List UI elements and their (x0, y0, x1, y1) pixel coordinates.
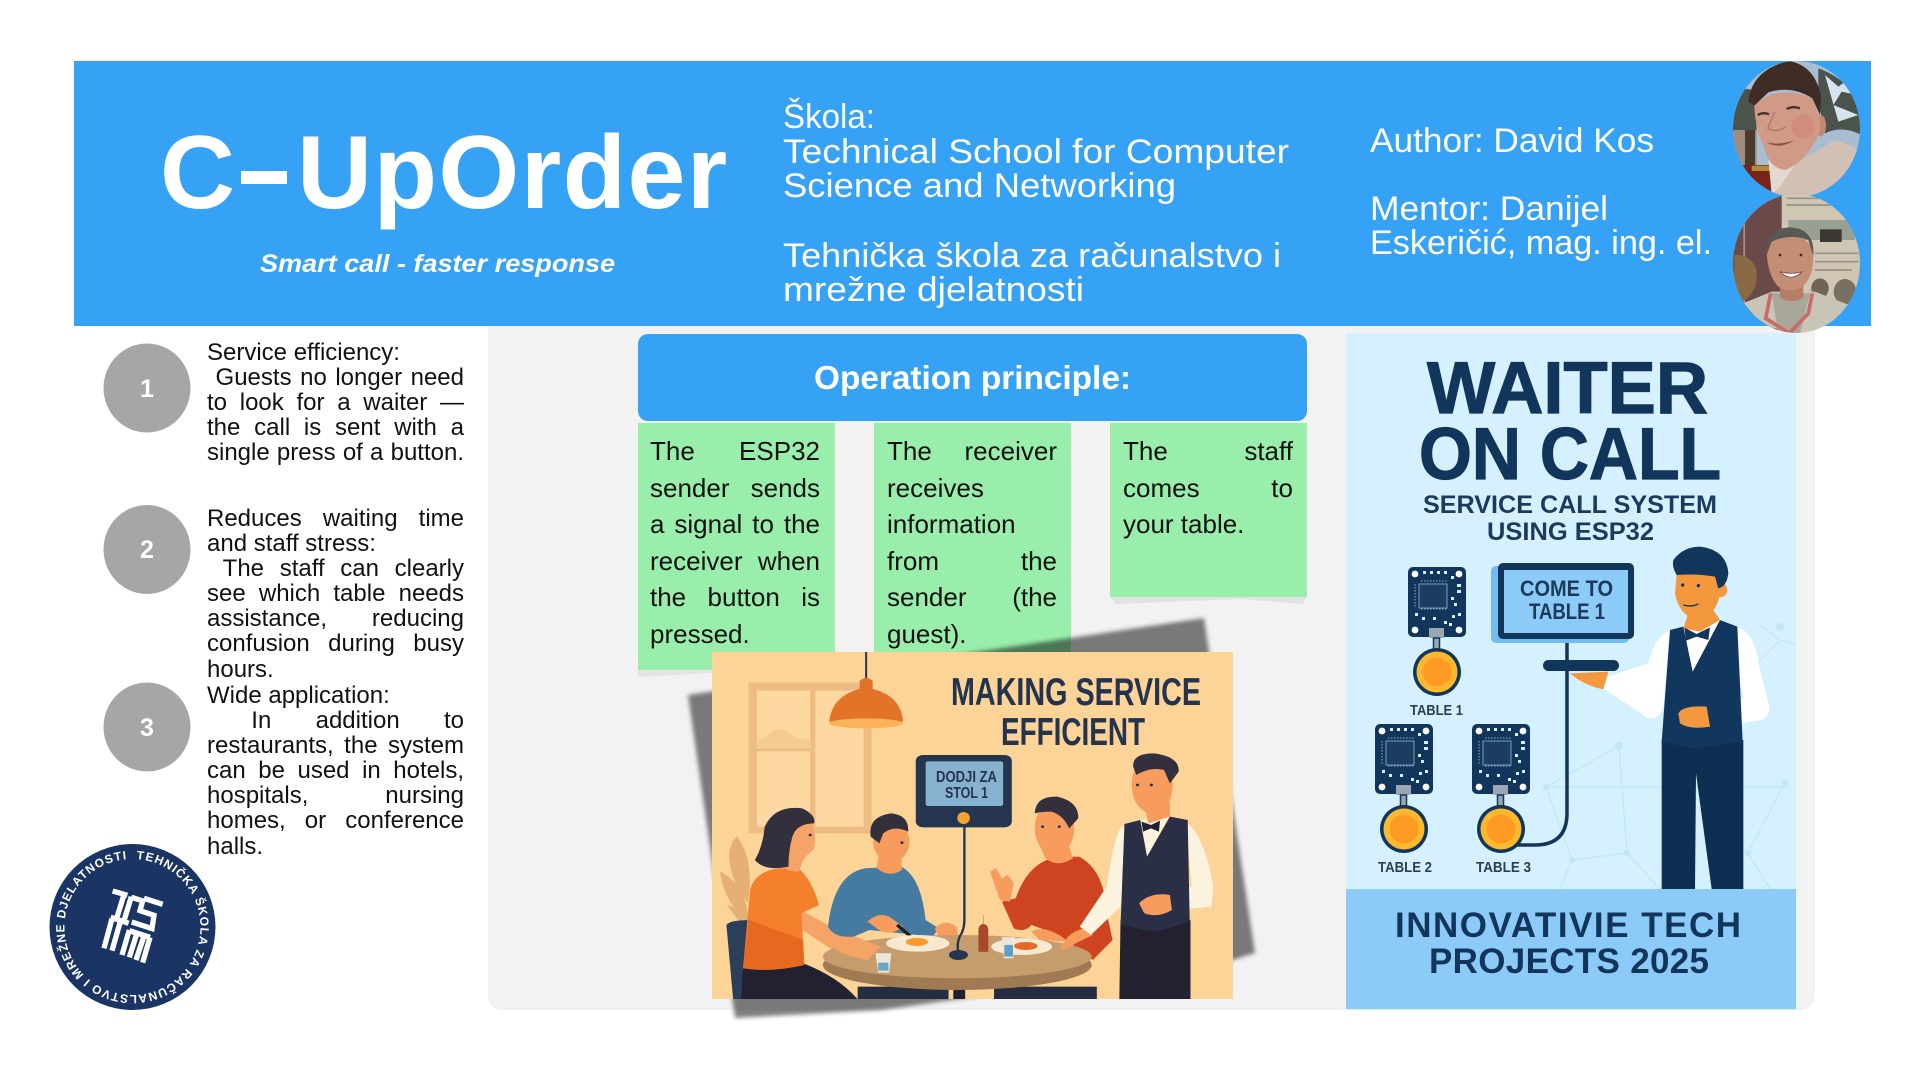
author and mentor: Mentor: Danijel (1370, 190, 1608, 228)
step text 1: pressed. (650, 618, 750, 648)
call display and wire (1491, 563, 1634, 845)
school text (783, 98, 1289, 309)
title: - (252, 129, 277, 213)
window (749, 682, 871, 833)
benefit text 3: hospitals, nursing (207, 782, 464, 809)
author and mentor (1370, 122, 1712, 262)
operation principle heading: Operation principle: (814, 359, 1131, 396)
header banner (74, 61, 1871, 326)
benefit text 2: Reduces waiting time (207, 505, 464, 532)
benefit text 2: The staff can clearly (223, 555, 464, 582)
school text: Škola: (783, 98, 875, 136)
step badge 3 (104, 682, 190, 772)
poster: waiter on call (1346, 333, 1796, 1010)
photo: author (1733, 61, 1860, 196)
benefit text 1: to look for a waiter — (207, 389, 464, 416)
lamp (829, 652, 903, 728)
benefit text 2: hours. (207, 656, 274, 683)
esp32 board table 2: TABLE 2 (1378, 859, 1432, 876)
step text 2: sender (the (887, 582, 1057, 612)
benefit text 3: can be used in hotels, (207, 757, 464, 784)
step text 2: from the (887, 546, 1057, 576)
benefit text 3: Wide application: (207, 682, 390, 709)
esp32 board table 2 (1375, 724, 1433, 876)
step badge 1: 1 (140, 375, 154, 403)
benefit text 3: restaurants, the system (207, 732, 464, 759)
step text 1 (650, 436, 820, 648)
step text 1: sender sends (650, 472, 820, 502)
school text: Science and Networking (783, 167, 1176, 205)
step text 1: The ESP32 (650, 436, 820, 466)
poster title (1419, 348, 1721, 495)
step badge 3: 3 (140, 714, 154, 742)
step text 1: a signal to the (650, 509, 820, 539)
school text: Technical School for Computer (783, 133, 1289, 171)
photo: mentor (1733, 196, 1860, 333)
school text: mrežne djelatnosti (783, 271, 1084, 309)
plates and drinks (875, 915, 1052, 973)
benefit text 2 (207, 505, 464, 683)
poster footer text: PROJECTS 2025 (1429, 942, 1709, 981)
benefit text 1: Guests no longer need (216, 364, 464, 391)
author and mentor: Eskeričić, mag. ing. el. (1370, 224, 1712, 262)
step text 1: receiver when (650, 546, 820, 576)
step badge 1 (104, 344, 190, 432)
step badge 2 (104, 505, 190, 594)
author and mentor: Author: David Kos (1370, 122, 1654, 160)
plant (720, 837, 751, 922)
esp32 board table 1: TABLE 1 (1410, 702, 1463, 719)
benefit text 3 (207, 682, 464, 860)
benefit text 3: halls. (207, 833, 263, 860)
woman (726, 808, 877, 999)
school text: Tehnička škola za računalstvo i (783, 237, 1281, 275)
benefit text 1: Service efficiency: (207, 339, 400, 366)
poster footer text (1395, 906, 1741, 981)
step text 3: your table. (1123, 509, 1244, 539)
step text 2: information (887, 509, 1016, 539)
step text 1: the button is (650, 582, 820, 612)
poster subtitle (1423, 491, 1717, 546)
table (823, 935, 1097, 1000)
title: C (160, 115, 235, 231)
title: UpOrder (297, 115, 729, 231)
illustration heading (951, 671, 1201, 754)
benefit text 3: homes, or conference (207, 807, 464, 834)
benefit text 2: see which table needs (207, 580, 464, 607)
step text 2: guest). (887, 618, 966, 648)
panel: grey content background (488, 316, 1815, 1010)
poster waiter figure (1570, 547, 1769, 889)
poster subtitle: USING ESP32 (1487, 518, 1654, 546)
operation principle heading (638, 334, 1307, 421)
benefit text 2: assistance, reducing (207, 605, 464, 632)
man in blue sweater (828, 813, 958, 938)
step text 3 (1123, 436, 1293, 539)
step badge 2: 2 (140, 536, 154, 564)
school logo: TEHNIČKA ŠKOLA ZA RAČUNALSTVO I MREŽNE DJELATNOSTI (56, 850, 209, 1004)
step text 3: comes to (1123, 472, 1293, 502)
device screen text (936, 769, 997, 802)
man in red sweater (990, 797, 1113, 960)
benefit text 3: In addition to (251, 707, 464, 734)
poster subtitle: SERVICE CALL SYSTEM (1423, 491, 1717, 519)
tagline: Smart call - faster response (260, 250, 615, 278)
step text 2 (887, 436, 1057, 648)
faces (809, 784, 1153, 844)
poster title: ON CALL (1419, 414, 1721, 495)
device screen text: DODJI ZA (936, 769, 997, 786)
poster footer text: INNOVATIVIE TECH (1395, 906, 1741, 945)
green step boxes (638, 423, 1307, 677)
benefit text 1 (207, 339, 464, 466)
call device (916, 755, 1012, 960)
step text 3: The staff (1123, 436, 1293, 466)
illustration shadow (688, 618, 1255, 1018)
waiter (1061, 753, 1213, 999)
illustration: making service efficient (712, 652, 1233, 1000)
esp32 board table 3: TABLE 3 (1476, 859, 1531, 876)
benefit text 1: the call is sent with a (207, 414, 464, 441)
esp32 board table 1 (1408, 567, 1466, 719)
illustration heading: EFFICIENT (1001, 711, 1145, 754)
benefit text 2: confusion during busy (207, 630, 464, 657)
call display and wire: TABLE 1 (1529, 599, 1605, 624)
call display and wire: COME TO (1520, 576, 1613, 601)
esp32 board table 3 (1472, 724, 1531, 876)
step text 2: receives (887, 472, 984, 502)
illustration heading: MAKING SERVICE (951, 671, 1201, 714)
step text 2: The receiver (887, 436, 1057, 466)
poster title: WAITER (1427, 348, 1708, 429)
benefit text 1: single press of a button. (207, 439, 464, 466)
device screen text: STOL 1 (945, 785, 988, 802)
benefit text 2: and staff stress: (207, 530, 376, 557)
hands on table (834, 941, 880, 960)
